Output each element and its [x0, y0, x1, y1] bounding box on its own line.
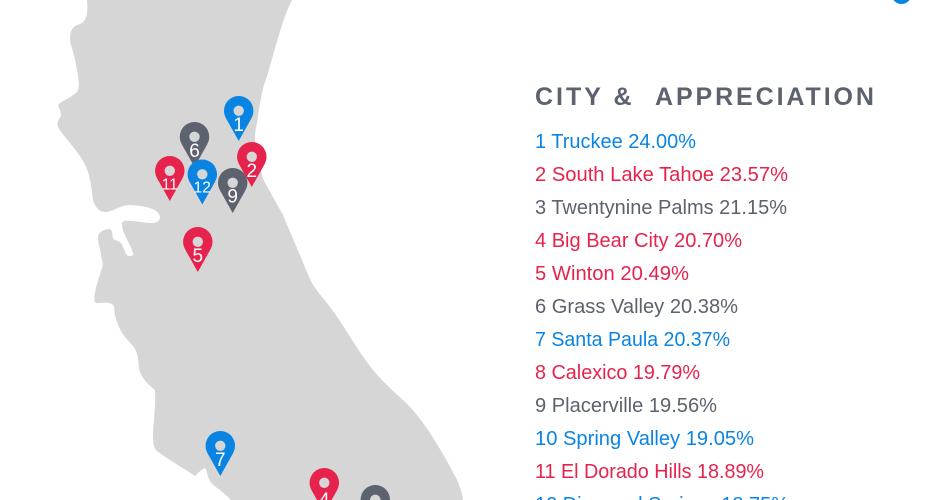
list item 6: 6 Grass Valley 20.38%: [535, 296, 738, 318]
list item 7: 7 Santa Paula 20.37%: [535, 329, 730, 351]
pin 12 Diamond Springs: [188, 160, 217, 204]
pin 9 Placerville: 9: [227, 186, 238, 208]
map of California: [57, 0, 463, 500]
pin 4 Big Bear City: [310, 468, 339, 500]
list item 5: 5 Winton 20.49%: [535, 263, 689, 285]
pin 12 Diamond Springs: 12: [194, 180, 211, 196]
pin 11 El Dorado Hills: 11: [162, 176, 178, 194]
pin 7 Santa Paula: 7: [215, 450, 226, 471]
heading: APPRECIATION: [655, 83, 877, 111]
list item 8: 8 Calexico 19.79%: [535, 362, 700, 384]
list item 10: 10 Spring Valley 19.05%: [535, 428, 754, 450]
pin 2 South Lake Tahoe: 2: [247, 161, 257, 182]
list item 4: 4 Big Bear City 20.70%: [535, 230, 742, 252]
heading: CITY &: [535, 83, 634, 111]
list item 1: 1 Truckee 24.00%: [535, 131, 696, 153]
clipped blue marker, top right: [892, 0, 912, 4]
pin 5 Winton: 5: [193, 246, 203, 267]
pin 2 South Lake Tahoe: [237, 142, 266, 187]
pin 11 El Dorado Hills: [155, 156, 184, 201]
list item 2: 2 South Lake Tahoe 23.57%: [535, 164, 788, 186]
city appreciation list: [535, 131, 789, 500]
pin 9 Placerville: [218, 168, 247, 213]
pin 6 Grass Valley: [180, 122, 209, 167]
pin 3 Twentynine Palms: [361, 485, 390, 500]
list item 11: 11 El Dorado Hills 18.89%: [535, 461, 764, 483]
pin 5 Winton: [183, 227, 212, 272]
pin 6 Grass Valley: 6: [189, 141, 200, 162]
heading: [535, 83, 877, 111]
pin 1 Truckee: 1: [233, 115, 244, 136]
pin 7 Santa Paula: [206, 431, 235, 476]
list item 3: 3 Twentynine Palms 21.15%: [535, 197, 787, 219]
list item 9: 9 Placerville 19.56%: [535, 395, 717, 417]
pin 1 Truckee: [224, 96, 253, 141]
